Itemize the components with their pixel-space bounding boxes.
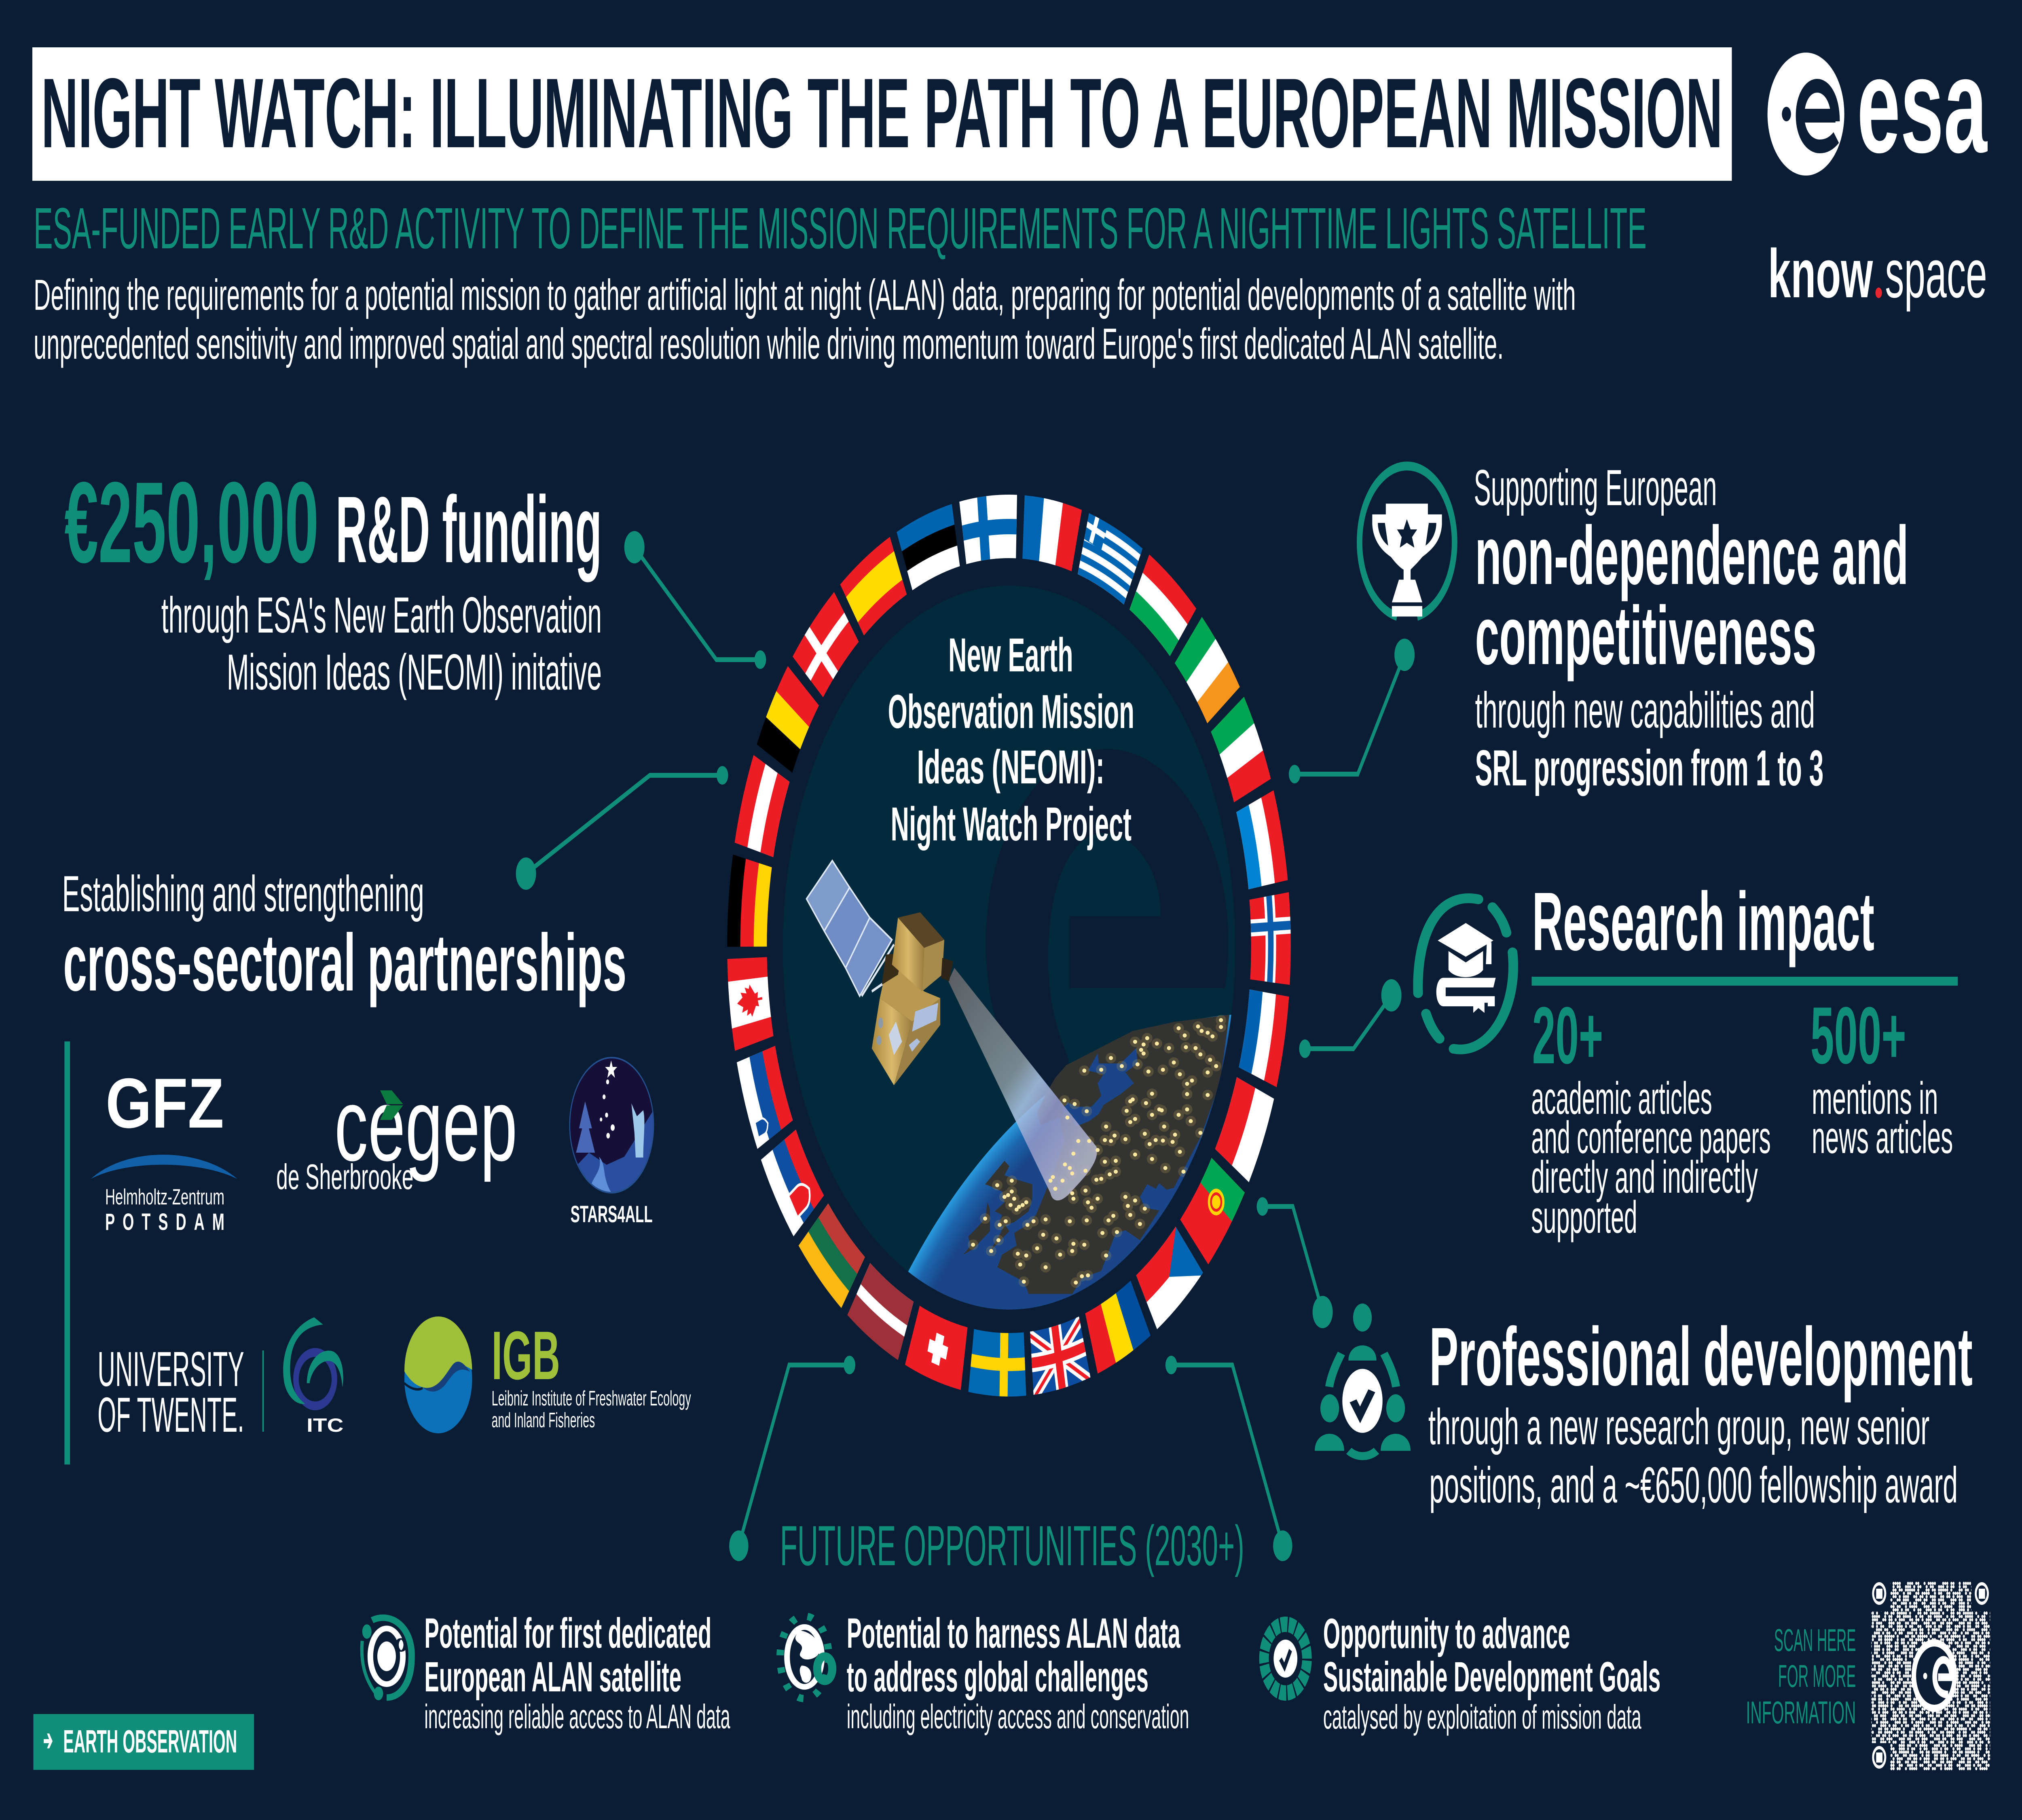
logo: GFZ: GFZ: [106, 1064, 224, 1143]
central illustration: NEOMI disc: [781, 582, 1251, 1321]
QR code: [1830, 1579, 1992, 1773]
flag: Denmark: [622, 326, 1379, 1538]
scan label: SCAN HERE: [1774, 1622, 1856, 1658]
partnerships heading: [62, 866, 626, 1008]
flag: Poland: [631, 341, 1387, 1550]
funding block: through ESA's New Earth Observation: [161, 587, 602, 644]
flag: Lithuania: [609, 306, 1409, 1585]
icon: globe and gear: [780, 1616, 832, 1699]
non-dependence text: SRL progression from 1 to 3: [1475, 740, 1823, 797]
non-dependence text: Supporting European: [1474, 460, 1717, 516]
opportunity 2 text: [847, 1609, 1189, 1735]
professional development text: [1428, 1310, 1973, 1513]
non-dependence text: through new capabilities and: [1475, 682, 1815, 739]
flag: Slovakia: [615, 316, 1402, 1575]
logo: IGB: and Inland Fisheries: [492, 1409, 595, 1432]
partnerships heading: Establishing and strengthening: [62, 866, 424, 923]
disc heading: Night Watch Project: [890, 797, 1132, 851]
partnerships heading: cross-sectoral partnerships: [63, 918, 626, 1008]
stat: 20+ academic articles: directly and indirectly: [1531, 1151, 1758, 1202]
opportunity 1 text: increasing reliable access to ALAN data: [424, 1697, 730, 1735]
flag: Slovenia: [643, 361, 1375, 1530]
connector: non-dependence: [1289, 639, 1415, 783]
stat: 20+ academic articles: supported: [1531, 1191, 1637, 1242]
connector: partnerships: [516, 766, 728, 890]
logo: GFZ: POTSDAM: [105, 1209, 224, 1235]
scan label: [1746, 1622, 1856, 1730]
flag: France: [1022, 495, 1082, 571]
flag: Finland: [959, 495, 1017, 564]
logo: esa: esa: [1857, 30, 1988, 181]
future opportunities heading: FUTURE OPPORTUNITIES (2030+): [780, 1514, 1244, 1577]
subtitle: ESA-FUNDED EARLY R&D ACTIVITY TO DEFINE THE MISSION REQUIREMENTS FOR A NIGHTTIME LIGHTS SATELLITE: [34, 195, 1647, 261]
flag: Czechia: [612, 310, 1407, 1583]
logo: cegep de Sherbrooke: [276, 1068, 517, 1197]
earth observation tag: EARTH OBSERVATION: [63, 1724, 237, 1760]
disc heading: [888, 628, 1134, 851]
flag: Spain: [621, 324, 1397, 1567]
intro text: Defining the requirements for a potential mission to gather artificial light at night (ALAN) data, preparing for potential developments of a satellite with: [34, 271, 1576, 319]
professional development text: through a new research group, new senior: [1428, 1399, 1929, 1455]
icon: SDG wheel: [1264, 1624, 1307, 1693]
opportunity 2 text: including electricity access and conservation: [847, 1697, 1189, 1735]
logo: Stars4All: STARS4ALL: [571, 1201, 653, 1227]
logo: esa: [1768, 30, 1988, 181]
opportunity 3 text: Opportunity to advance: [1323, 1610, 1570, 1657]
icon: graduation cap and book: [1418, 898, 1513, 1050]
non-dependence text: [1474, 460, 1908, 797]
opportunity 1 text: European ALAN satellite: [424, 1653, 681, 1701]
icon: trophy: [1360, 466, 1455, 616]
logo: University of Twente ITC: [97, 1317, 343, 1442]
icon: satellite orbit: [362, 1618, 412, 1700]
title banner: NIGHT WATCH: ILLUMINATING THE PATH TO A EUROPEAN MISSION: [41, 58, 1723, 169]
scan label: FOR MORE: [1778, 1658, 1856, 1694]
flag: Belgium: [735, 641, 1027, 990]
intro text: unprecedented sensitivity and improved spatial and spectral resolution while driving momentum toward Europe's first dedicated ALAN satellite.: [34, 320, 1504, 368]
opportunity 1 text: Potential for first dedicated: [424, 1609, 711, 1657]
logo: IGB: [404, 1316, 691, 1433]
stat: 500+ news mentions: 500+: [1810, 990, 1906, 1081]
logo: University of Twente ITC: ITC: [307, 1415, 343, 1436]
connector: research impact: [1299, 979, 1402, 1058]
stat: 500+ news mentions: [1810, 990, 1953, 1163]
partner bar: [64, 1041, 70, 1464]
flag: Norway: [743, 519, 1299, 1371]
flag ring: [609, 306, 1409, 1585]
flag: Italy: [994, 674, 1293, 992]
non-dependence text: non-dependence and: [1475, 509, 1908, 602]
connector: future right: [1165, 1356, 1292, 1561]
funding block: R&D funding: [336, 477, 602, 582]
stat: 500+ news mentions: news articles: [1812, 1112, 1953, 1163]
logo: know.space: space: [1885, 236, 1987, 312]
flag: Greece: [1078, 513, 1143, 604]
disc heading: Ideas (NEOMI):: [917, 740, 1104, 794]
flag: Netherlands: [672, 406, 1346, 1485]
professional development text: positions, and a ~€650,000 fellowship award: [1429, 1458, 1958, 1513]
flag: Romania: [979, 924, 1163, 1410]
stat: 20+ academic articles: and conference papers: [1531, 1112, 1771, 1163]
funding block: €250,000: [64, 458, 319, 587]
flag: Estonia: [654, 377, 1364, 1514]
logo: know.space: know: [1768, 236, 1873, 312]
flag: Ireland: [988, 588, 1260, 985]
opportunity 1 text: [424, 1609, 730, 1735]
logo: cegep de Sherbrooke: de Sherbrooke: [276, 1157, 413, 1197]
non-dependence text: competitiveness: [1475, 589, 1817, 682]
disc heading: New Earth: [948, 628, 1073, 681]
opportunity 3 text: [1323, 1610, 1660, 1736]
flag: Canada: [704, 893, 1013, 1062]
stat: 20+ academic articles: [1531, 990, 1771, 1242]
beam of light: [948, 968, 1097, 1200]
logo: University of Twente ITC: OF TWENTE.: [97, 1387, 244, 1442]
stat: 500+ news mentions: mentions in: [1812, 1073, 1938, 1124]
logo: University of Twente ITC: UNIVERSITY: [97, 1342, 244, 1397]
flag: Austria: [649, 369, 1369, 1522]
stat: 20+ academic articles: 20+: [1532, 990, 1603, 1081]
flag: Switzerland: [900, 1297, 976, 1400]
professional development text: Professional development: [1429, 1310, 1973, 1403]
flag: Latvia: [624, 330, 1394, 1562]
logo: Stars4All: [570, 1058, 655, 1227]
logo: IGB: IGB: [492, 1318, 560, 1394]
title banner: [32, 47, 1732, 181]
logo: know.space: [1768, 236, 1987, 312]
flag: Sweden: [735, 510, 1282, 1420]
connector: future left: [729, 1356, 855, 1561]
satellite: [806, 861, 953, 1085]
scan label: INFORMATION: [1746, 1695, 1856, 1730]
flag: Portugal: [988, 851, 1292, 1293]
opportunity 2 text: to address global challenges: [847, 1653, 1148, 1701]
logo: IGB: Leibniz Institute of Freshwater Ecology: [492, 1387, 691, 1410]
connector: professional development: [1257, 1197, 1333, 1328]
flag: Hungary: [614, 313, 1404, 1578]
disc heading: Observation Mission: [888, 685, 1134, 738]
logo: GFZ: [91, 1064, 237, 1235]
icon: people around check: [1315, 1304, 1411, 1456]
intro text: [34, 271, 1576, 368]
stat: 20+ academic articles: academic articles: [1531, 1073, 1712, 1124]
opportunity 2 text: Potential to harness ALAN data: [847, 1609, 1181, 1657]
earth observation tag: [33, 1714, 254, 1770]
flag: Germany: [699, 449, 1319, 1442]
funding block: Mission Ideas (NEOMI) initative: [227, 644, 602, 701]
flag: Luxembourg: [665, 395, 1353, 1496]
logo: cegep de Sherbrooke: cegep: [334, 1068, 517, 1183]
logo: GFZ: Helmholtz-Zentrum: [105, 1184, 224, 1209]
research impact heading: Research impact: [1532, 875, 1874, 968]
connector: funding: [624, 531, 766, 669]
flag: United Kingdom: [702, 455, 1320, 1474]
opportunity 3 text: Sustainable Development Goals: [1323, 1653, 1660, 1701]
opportunity 3 text: catalysed by exploitation of mission data: [1323, 1698, 1641, 1736]
funding block: [64, 458, 602, 701]
